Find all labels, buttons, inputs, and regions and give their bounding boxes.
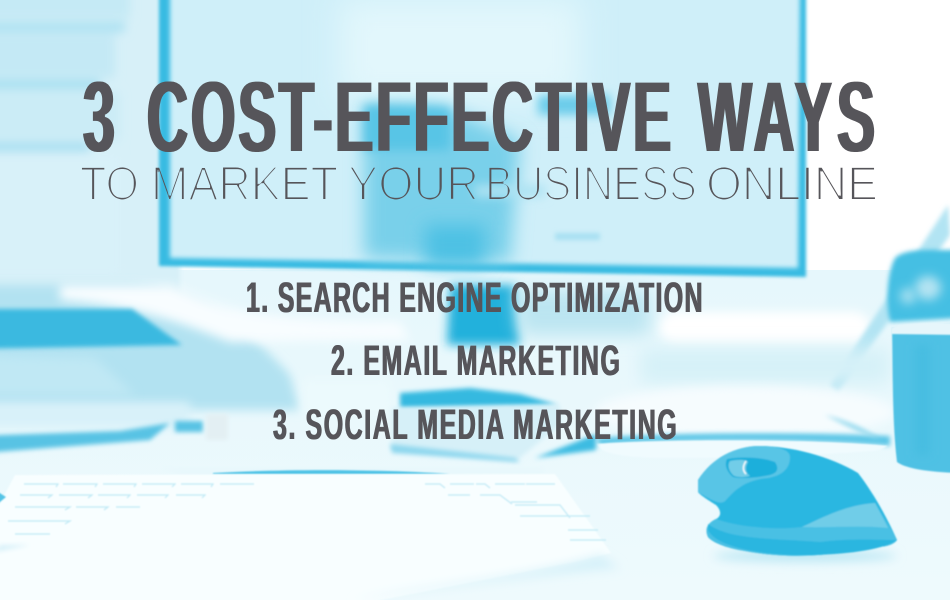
monitor (159, 0, 806, 277)
computer mouse (698, 446, 897, 556)
monitor stand (303, 285, 650, 415)
white desk highlight and blurred laptop (0, 285, 410, 454)
title: COST-EFFECTIVE (147, 59, 671, 174)
subtitle (80, 158, 878, 211)
white plate and pen (535, 205, 950, 458)
subtitle: YOUR (348, 158, 479, 211)
background gadget top right (888, 250, 950, 322)
left background window panel (0, 0, 180, 310)
notebook (390, 405, 560, 462)
list of three marketing methods (246, 274, 702, 449)
subtitle: TO (80, 158, 139, 211)
coffee mug (891, 323, 950, 473)
subtitle: MARKET (151, 158, 338, 211)
mouse shadow (713, 550, 897, 562)
subtitle: ONLINE (706, 158, 878, 211)
list item 2: 2. EMAIL MARKETING (331, 337, 620, 385)
title (83, 59, 875, 174)
title: WAYS (698, 59, 875, 174)
subtitle: BUSINESS (485, 158, 697, 211)
title: 3 (83, 59, 115, 174)
keyboard and paper (0, 468, 620, 600)
list item 1: 1. SEARCH ENGINE OPTIMIZATION (246, 274, 702, 322)
list item 3: 3. SOCIAL MEDIA MARKETING (273, 401, 677, 449)
